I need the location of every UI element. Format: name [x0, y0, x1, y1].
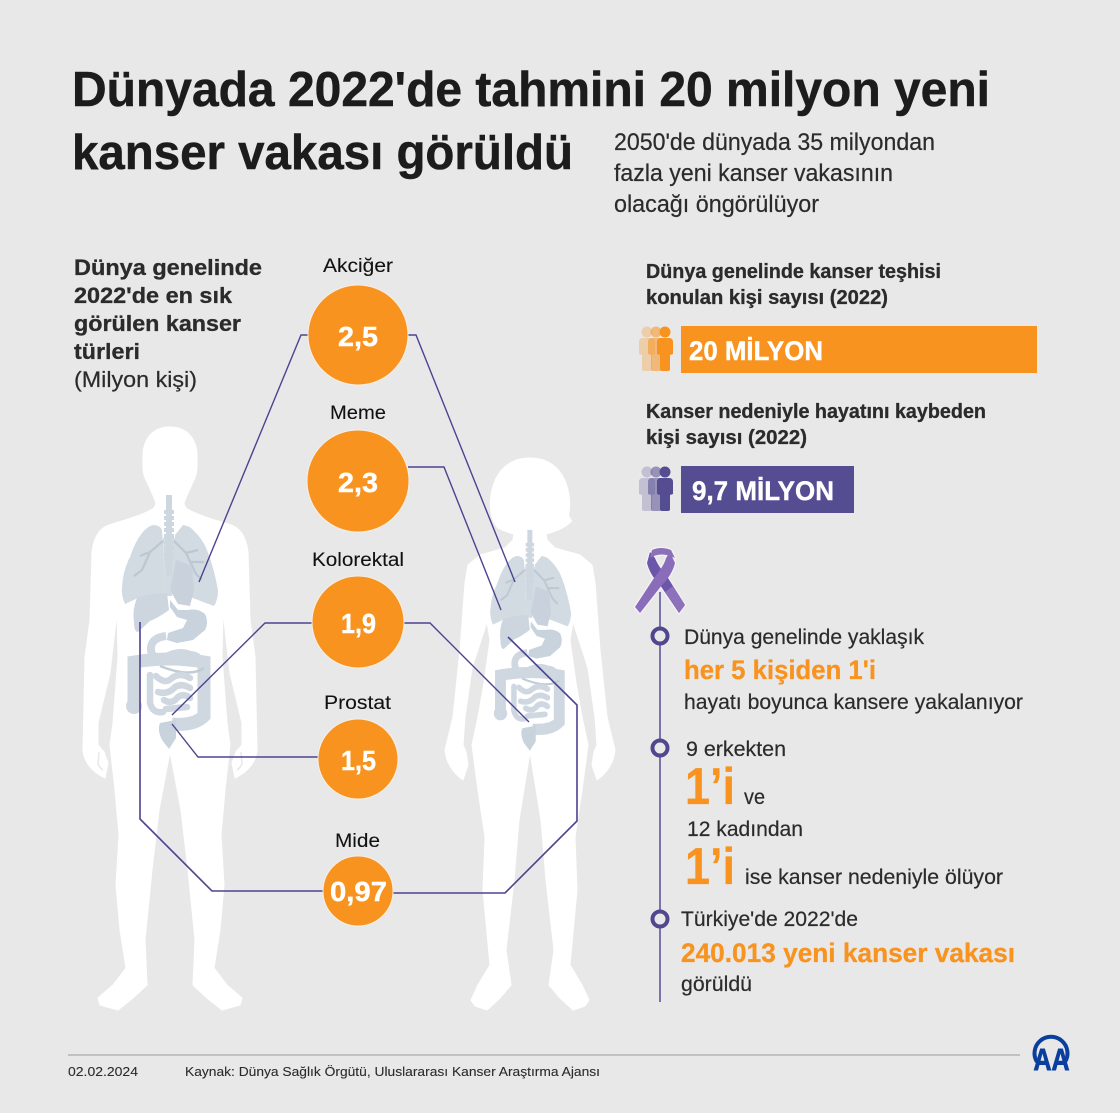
title: Dünyada 2022'de tahmini 20 milyon yeni: [72, 63, 990, 117]
fact: men and women mortality: 9 erkekten: [686, 738, 786, 761]
fact: one in five: her 5 kişiden 1'i: [684, 655, 876, 685]
bar: 20 million: [681, 326, 1037, 373]
fact: Türkiye: Türkiye'de 2022'de: [681, 908, 858, 931]
footer: date and source: 02.02.2024: [68, 1064, 138, 1079]
leader lines from circles to organs: [140, 335, 577, 893]
footer: date and source: Kaynak: Dünya Sağlık Örgütü, Uluslararası Kanser Araştırma Ajansı: [185, 1064, 600, 1079]
cancer type: colorectal: [312, 550, 404, 668]
title: [72, 63, 990, 180]
heading: most common cancer types: görülen kanser: [74, 311, 241, 336]
bar: 9.7 million: 9,7 MİLYON: [692, 476, 834, 506]
stat heading: deaths: kişi sayısı (2022): [646, 427, 807, 449]
heading: most common cancer types: 2022'de en sık: [74, 283, 233, 308]
stat heading: diagnosed: Dünya genelinde kanser teşhisi: [646, 261, 941, 283]
subtitle: 2050 projection: fazla yeni kanser vakasının: [614, 160, 893, 187]
cancer type: stomach: Mide: [335, 831, 380, 852]
cancer type: breast: Meme: [330, 403, 386, 424]
cancer type: breast: 2,3: [338, 467, 378, 498]
fact: Türkiye: görüldü: [681, 973, 752, 996]
cancer type: stomach: [323, 831, 393, 926]
bar: 9.7 million: [681, 466, 854, 513]
icon: people purple: [639, 466, 673, 511]
subtitle: 2050 projection: olacağı öngörülüyor: [614, 191, 819, 218]
icon: purple ribbon: [635, 548, 685, 613]
stat heading: deaths: [646, 401, 986, 449]
cancer type: lung: Akciğer: [323, 256, 394, 277]
heading: most common cancer types: Dünya genelinde: [74, 255, 262, 280]
fact: men and women mortality: 12 kadından: [687, 818, 803, 841]
cancer type: colorectal: Kolorektal: [312, 550, 404, 571]
female body silhouette with organs: [445, 458, 615, 1010]
fact: Türkiye: 240.013 yeni kanser vakası: [681, 938, 1015, 968]
cancer type: prostate: 1,5: [341, 745, 376, 776]
fact: men and women mortality: 1’i: [685, 758, 735, 816]
fact: men and women mortality: 1’i: [685, 838, 735, 896]
cancer type: stomach: 0,97: [330, 876, 387, 907]
fact: men and women mortality: ise kanser nedeniyle ölüyor: [745, 866, 1003, 889]
logo: AA: AA: [1034, 1042, 1070, 1077]
fact: one in five: hayatı boyunca kansere yakalanıyor: [684, 691, 1023, 714]
heading: most common cancer types: (Milyon kişi): [74, 367, 197, 392]
bar: 20 million: 20 MİLYON: [689, 336, 823, 366]
fact: men and women mortality: [652, 738, 1003, 896]
subtitle: 2050 projection: [614, 129, 935, 218]
stat heading: diagnosed: konulan kişi sayısı (2022): [646, 287, 888, 309]
stat heading: diagnosed: [646, 261, 941, 309]
cancer type: prostate: [318, 693, 398, 799]
cancer type: prostate: Prostat: [324, 693, 392, 714]
male body silhouette with organs: [83, 427, 257, 1010]
timeline line: [659, 592, 661, 1002]
title: kanser vakası görüldü: [72, 126, 573, 180]
heading: most common cancer types: [74, 255, 262, 392]
cancer type: breast: [307, 403, 409, 532]
fact: one in five: [652, 626, 1023, 714]
fact: men and women mortality: ve: [744, 786, 765, 809]
subtitle: 2050 projection: 2050'de dünyada 35 milyondan: [614, 129, 935, 156]
cancer type: lung: [308, 256, 408, 385]
heading: most common cancer types: türleri: [74, 339, 140, 364]
icon: people orange: [639, 326, 673, 371]
fact: Türkiye: [652, 908, 1015, 996]
cancer type: colorectal: 1,9: [341, 608, 376, 639]
stat heading: deaths: Kanser nedeniyle hayatını kaybeden: [646, 401, 986, 423]
cancer type: lung: 2,5: [338, 321, 378, 352]
fact: one in five: Dünya genelinde yaklaşık: [684, 626, 924, 649]
